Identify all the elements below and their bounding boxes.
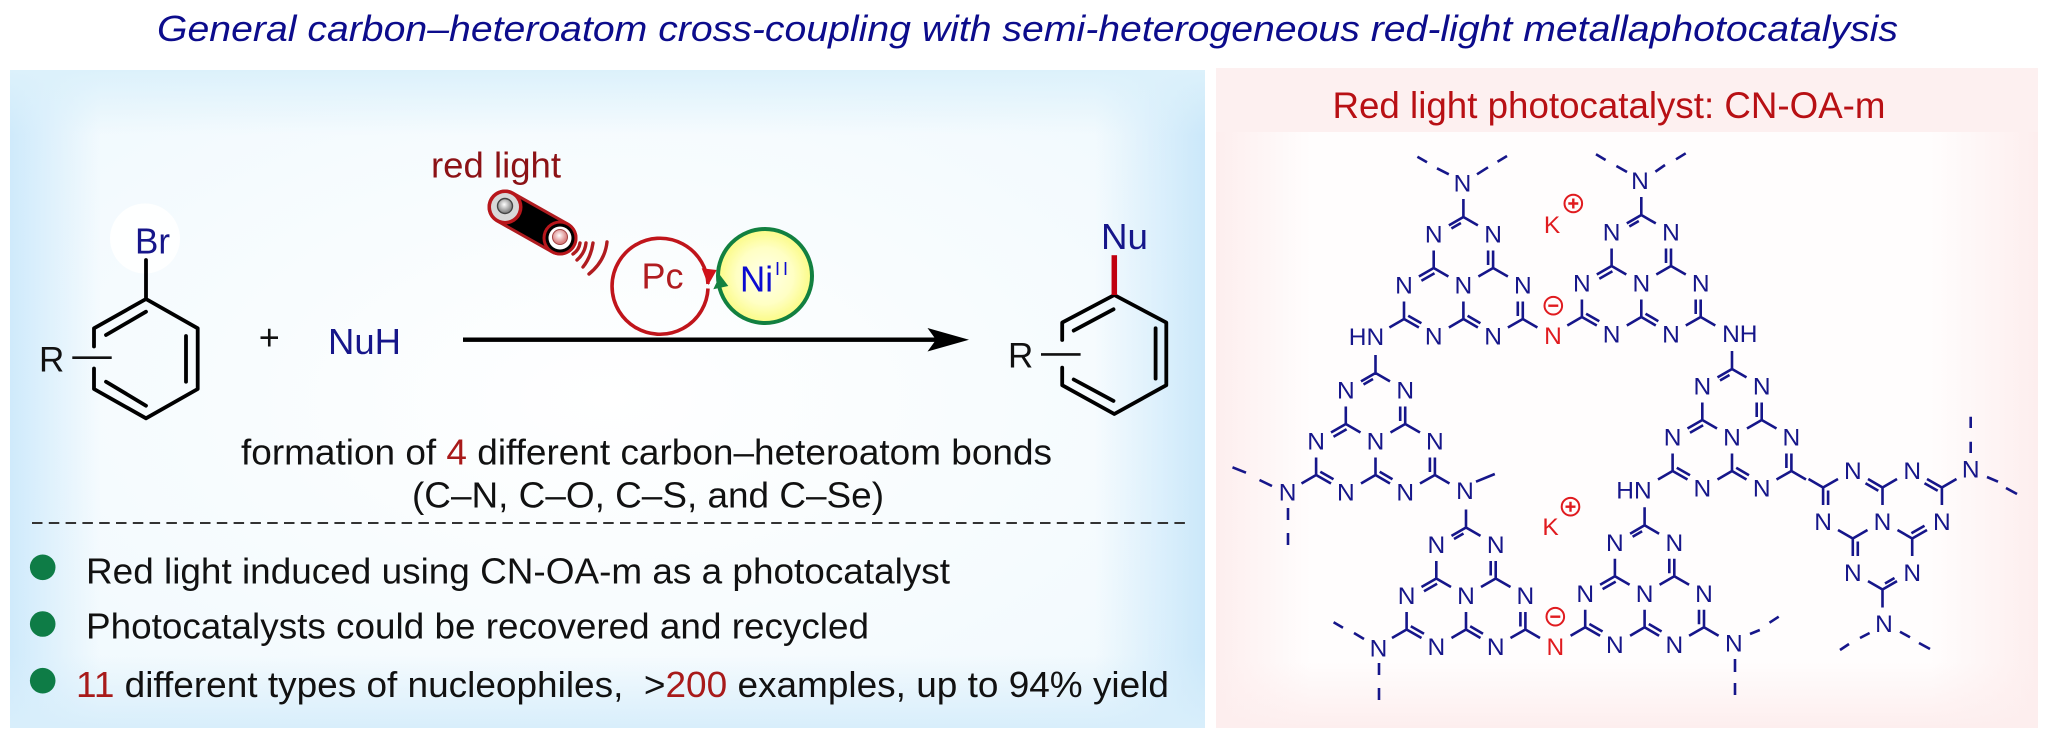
heptazine unit middle right: N: [1693, 476, 1711, 502]
linker and terminal nitrogen labels: [1279, 168, 1980, 662]
heptazine unit top right: N: [1603, 322, 1620, 348]
linker and terminal nitrogen labels: N: [1279, 480, 1296, 506]
panel heading: Red light photocatalyst: CN-OA-m: [1332, 85, 1886, 126]
title: General carbon–heteroatom cross-coupling with semi-heterogeneous red-light metallaphotocatalysis: [157, 8, 1898, 49]
heptazine unit bottom right: N: [1665, 530, 1683, 557]
heptazine unit top left: N: [1425, 222, 1443, 248]
heptazine unit middle left: N: [1367, 428, 1384, 456]
nickel cycle Ni(II): II: [775, 259, 788, 279]
heptazine unit bottom right: N: [1695, 581, 1713, 608]
linker and terminal nitrogen labels: N: [1370, 636, 1387, 662]
nickel cycle Ni(II): Ni: [740, 258, 773, 300]
heptazine unit middle right: N: [1723, 424, 1741, 452]
heptazine unit middle left: [1302, 355, 1450, 506]
heptazine unit middle right: [1658, 351, 1806, 502]
nucleophile NuH: NuH: [328, 321, 401, 362]
heptazine unit top right: N: [1662, 322, 1680, 348]
heptazine unit top left: [1389, 199, 1537, 350]
heptazine unit far right, inverted: N: [1844, 458, 1862, 485]
text: bond formation summary: (C–N, C–O, C–S, and C–Se): [412, 474, 884, 516]
plus sign: +: [259, 316, 280, 358]
heptazine unit far right, inverted: N: [1874, 509, 1891, 536]
heptazine unit bottom left: [1392, 510, 1540, 661]
heptazine unit bottom left: N: [1427, 532, 1445, 559]
icon: red light lamp: [488, 190, 578, 256]
aryl bromide reactant: [39, 204, 198, 418]
heptazine unit top right: N: [1662, 220, 1680, 246]
heptazine unit far right, inverted: N: [1814, 509, 1832, 536]
lower anionic nitrogen and potassium: N: [1546, 634, 1564, 661]
heptazine unit middle left: N: [1396, 480, 1414, 506]
heptazine unit middle right: N: [1753, 374, 1771, 400]
aryl bromide reactant: Br: [135, 220, 170, 261]
upper anionic nitrogen and potassium: N: [1544, 323, 1562, 350]
heptazine unit bottom right: N: [1606, 632, 1624, 659]
aryl bromide reactant: R: [39, 341, 64, 380]
heptazine unit middle right: N: [1783, 424, 1800, 452]
heptazine unit top left: N: [1425, 324, 1443, 350]
coupled product: Nu: [1101, 216, 1148, 257]
upper anionic nitrogen and potassium: K: [1544, 212, 1561, 239]
text: bond formation summary: [241, 432, 1052, 516]
heptazine unit far right, inverted: [1808, 458, 1956, 608]
heptazine unit top left: N: [1484, 324, 1502, 350]
panel: red light photocatalyst: [1216, 68, 2038, 728]
heptazine unit bottom left: N: [1487, 634, 1505, 661]
highlight: recycling: Photocatalysts could be recovered and recycled: [86, 606, 869, 646]
heptazine unit top right: N: [1692, 270, 1710, 298]
heptazine unit middle left: N: [1426, 428, 1444, 456]
heptazine unit bottom right: N: [1576, 581, 1594, 608]
linker and terminal nitrogen labels: NH: [1722, 321, 1757, 348]
nickel cycle Ni(II): [713, 229, 812, 323]
heptazine unit middle right: N: [1753, 476, 1771, 502]
heptazine unit far right, inverted: N: [1903, 458, 1921, 485]
heptazine unit top right: [1567, 197, 1715, 348]
heptazine unit far right, inverted: N: [1903, 560, 1921, 587]
heptazine unit middle right: N: [1693, 374, 1711, 400]
linker and terminal nitrogen labels: N: [1725, 630, 1743, 658]
red light label: red light: [431, 144, 561, 186]
linker and terminal nitrogen labels: HN: [1616, 478, 1652, 504]
heptazine unit middle left: N: [1307, 428, 1325, 456]
linker and terminal nitrogen labels: HN: [1349, 324, 1384, 351]
icon: light waves: [573, 242, 607, 274]
heptazine unit bottom right: N: [1606, 530, 1624, 557]
reaction arrow: [463, 328, 969, 352]
heptazine unit bottom left: N: [1457, 583, 1475, 610]
heptazine unit top left: N: [1395, 272, 1413, 300]
heptazine unit middle right: N: [1664, 424, 1681, 452]
heptazine unit bottom left: N: [1398, 583, 1415, 610]
lower anionic nitrogen and potassium: K: [1542, 514, 1559, 541]
dashed methyl bonds: [1232, 153, 2017, 700]
heptazine unit bottom left: N: [1517, 583, 1534, 610]
linker and terminal nitrogen labels: N: [1875, 611, 1893, 638]
highlight: red light: Red light induced using CN-OA-m as a photocatalyst: [86, 550, 950, 592]
heptazine unit far right, inverted: N: [1844, 560, 1862, 587]
photocatalyst cycle Pc: [612, 238, 717, 334]
linker and terminal nitrogen labels: N: [1631, 168, 1649, 195]
heptazine unit bottom right: N: [1636, 581, 1653, 608]
heptazine unit middle left: N: [1337, 378, 1355, 404]
panel: reaction and highlights: [10, 70, 1205, 728]
heptazine unit top left: N: [1455, 272, 1472, 300]
heptazine unit top right: N: [1603, 220, 1620, 246]
heptazine unit top right: N: [1573, 270, 1591, 298]
linker and terminal nitrogen labels: N: [1456, 478, 1474, 505]
heptazine unit bottom right: [1571, 507, 1719, 659]
lower anionic nitrogen and potassium: [1542, 498, 1579, 661]
heptazine unit top left: N: [1484, 222, 1502, 248]
heptazine unit top right: N: [1632, 270, 1650, 298]
heptazine unit bottom right: N: [1665, 632, 1683, 659]
text: bond formation summary: formation of 4 different carbon–heteroatom bonds: [241, 432, 1052, 472]
heptazine unit middle left: N: [1337, 480, 1355, 506]
linker and terminal nitrogen labels: N: [1454, 170, 1471, 198]
linker and terminal nitrogen labels: N: [1962, 456, 1980, 484]
heptazine unit middle left: N: [1396, 378, 1414, 404]
structure: CN-OA-m: [1232, 153, 2017, 700]
heptazine unit bottom left: N: [1487, 532, 1505, 559]
heptazine unit top left: N: [1514, 272, 1532, 300]
coupled product: R: [1008, 337, 1033, 376]
heptazine unit bottom left: N: [1427, 634, 1445, 661]
highlight: scope: 11 different types of nucleophiles, > 200 examples, up to 94% yield: [76, 664, 1169, 705]
photocatalyst cycle Pc: Pc: [642, 256, 684, 296]
heptazine unit far right, inverted: N: [1933, 509, 1951, 536]
upper anionic nitrogen and potassium: [1544, 195, 1582, 350]
coupled product: [1008, 216, 1166, 414]
